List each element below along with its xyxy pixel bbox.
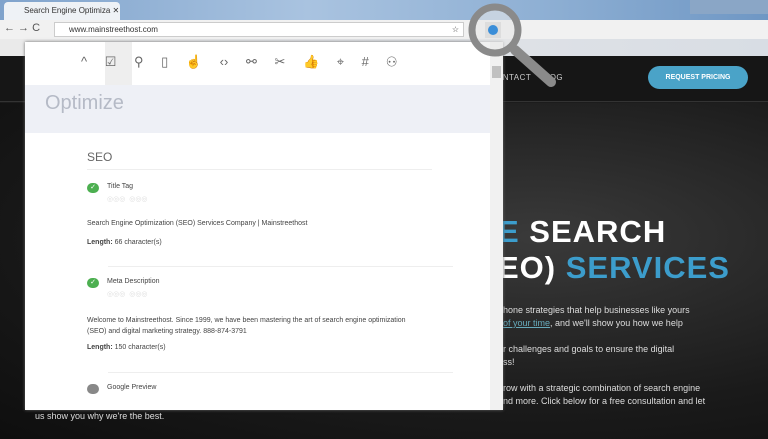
icon toolbar [81, 42, 397, 85]
scrollbar [490, 42, 503, 410]
hero text: hone strategies that help businesses like yours [503, 305, 690, 315]
address bar: ← → C [4, 22, 40, 34]
popup panel: Meta Description [107, 278, 160, 285]
tab: Search Engine Optimiza ✕ [24, 6, 119, 15]
hero text: r challenges and goals to ensure the digital [503, 344, 674, 354]
hero text [503, 305, 706, 406]
popup panel: Title Tag [107, 183, 133, 190]
hero text: row with a strategic combination of search engine [503, 383, 700, 393]
SEO heading [87, 150, 432, 170]
button: request pricing: REQUEST PRICING [666, 74, 730, 81]
tab [4, 2, 120, 20]
window controls [690, 0, 768, 14]
meta description item [87, 278, 406, 351]
hero headline [498, 214, 730, 285]
popup panel [25, 42, 503, 410]
popup panel: ✓ [90, 279, 96, 286]
popup panel: ✓ [90, 184, 96, 191]
popup panel: ◎◎◎ ◎◎◎ [107, 291, 148, 298]
popup panel: Welcome to Mainstreethost. Since 1999, we have been mastering the art of search engine optimization (SEO) and digital marketing strategy. 888-874-3791 [87, 317, 406, 335]
address bar: ☆ [452, 25, 459, 34]
site header: ONTACT LOG [496, 73, 563, 82]
hero text: nd more. Click below for a free consultation and let [503, 396, 705, 406]
hero headline: EO) SERVICES [498, 250, 730, 285]
hero text: of your time, and we'll show you how we help [503, 318, 683, 328]
icon toolbar: ^ ☑ ⚲ ▯ ☝ ‹› ⚯ ✂ 👍 ⌖ # ⚇ [81, 54, 397, 69]
browser tab bar [0, 0, 768, 20]
bookmarks bar [0, 39, 768, 56]
button: request pricing [648, 66, 748, 89]
hero headline: E SEARCH [498, 214, 666, 249]
hero text: ss! [503, 357, 515, 367]
text: us show you why we're the best. [35, 411, 164, 421]
address bar: www.mainstreethost.com [69, 25, 158, 34]
popup panel: Length: 66 character(s) [87, 239, 162, 246]
popup panel: Google Preview [107, 384, 156, 391]
optimize heading band: Optimize [45, 92, 124, 114]
site header [0, 56, 768, 102]
popup panel: Length: 150 character(s) [87, 344, 166, 351]
popup panel: ◎◎◎ ◎◎◎ [107, 196, 148, 203]
google preview item [87, 384, 156, 394]
address bar [0, 20, 768, 39]
popup panel: Search Engine Optimization (SEO) Services Company | Mainstreethost [87, 220, 307, 227]
hero background [0, 103, 768, 439]
optimize heading band [25, 85, 490, 133]
SEO heading: SEO [87, 150, 112, 164]
title tag item [87, 182, 308, 246]
icon: magnifier [468, 4, 556, 87]
